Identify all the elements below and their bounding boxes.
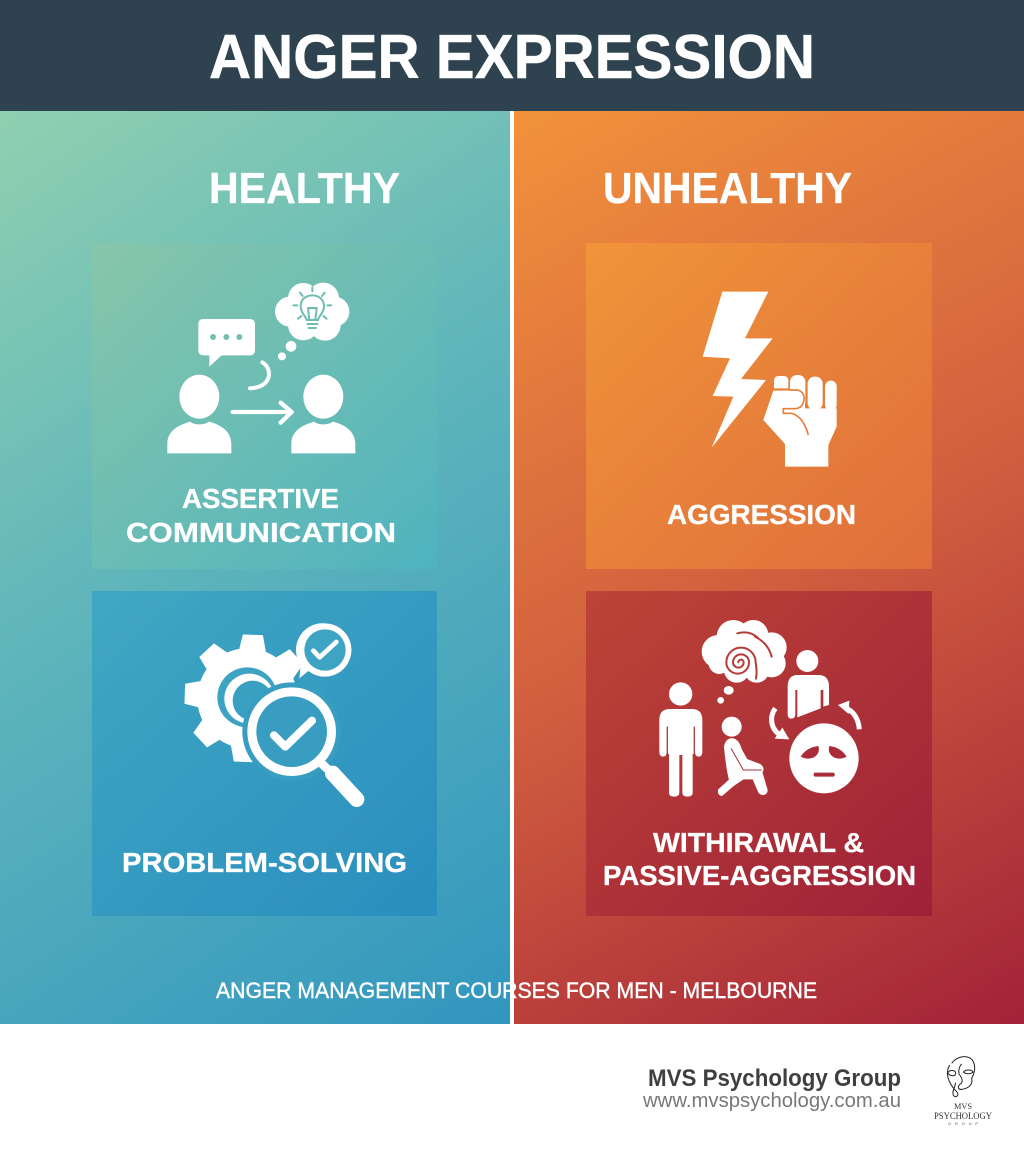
heading: unhealthy: UNHEALTHY bbox=[603, 164, 852, 213]
label: withdrawal and passive-aggression bbox=[603, 827, 916, 891]
footer: company name and website: MVS Psychology Group bbox=[648, 1065, 901, 1092]
label: withdrawal and passive-aggression: PASSIVE-AGGRESSION bbox=[603, 860, 916, 891]
icon: gear and magnifier bbox=[184, 623, 357, 799]
label: assertive communication bbox=[126, 483, 396, 548]
label: aggression: AGGRESSION bbox=[667, 499, 856, 530]
panel: healthy bbox=[0, 111, 510, 1024]
label: problem-solving: PROBLEM-SOLVING bbox=[122, 847, 407, 878]
logo: line-art face bbox=[934, 1057, 992, 1126]
label: withdrawal and passive-aggression: WITHIRAWAL & bbox=[653, 827, 864, 858]
footer: company name and website: www.mvspsychology.com.au bbox=[642, 1090, 901, 1112]
heading: healthy: HEALTHY bbox=[209, 164, 400, 213]
card: assertive communication bbox=[92, 243, 437, 569]
label: assertive communication: ASSERTIVE bbox=[182, 483, 339, 514]
logo: line-art face: GROUP bbox=[948, 1121, 978, 1126]
icon: lightning bolt bbox=[703, 292, 773, 448]
icon: fist bbox=[763, 375, 837, 467]
logo: line-art face: MVS bbox=[954, 1101, 972, 1111]
logo: line-art face: PSYCHOLOGY bbox=[934, 1112, 992, 1122]
title banner bbox=[0, 0, 1024, 111]
icon: people, brain and sad face bbox=[659, 620, 859, 797]
footer: company name and website bbox=[642, 1065, 901, 1112]
title: ANGER EXPRESSION bbox=[209, 23, 815, 92]
caption: course name: ANGER MANAGEMENT COURSES FOR MEN - MELBOURNE bbox=[216, 978, 817, 1003]
card: withdrawal and passive-aggression bbox=[586, 591, 932, 916]
panel: unhealthy bbox=[514, 111, 1024, 1024]
label: assertive communication: COMMUNICATION bbox=[126, 517, 396, 548]
icon: two people communicating bbox=[167, 283, 355, 453]
card: aggression bbox=[586, 243, 932, 569]
card: problem-solving bbox=[92, 591, 437, 916]
